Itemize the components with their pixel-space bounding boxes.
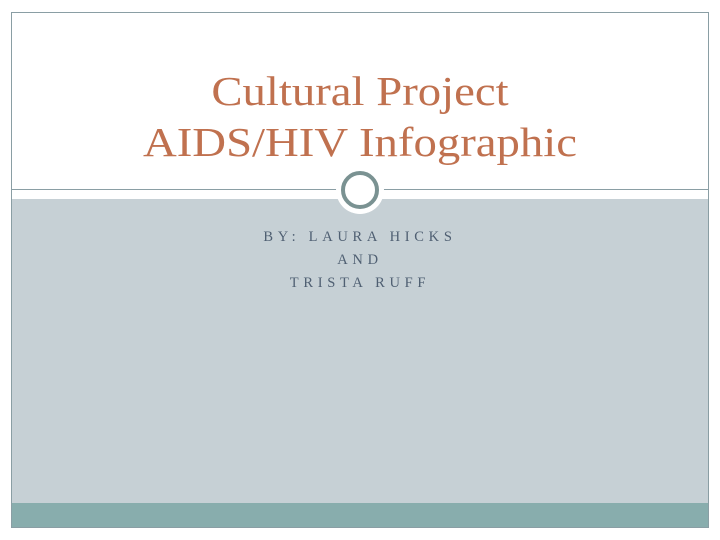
title [143,68,577,165]
title: Cultural Project [211,68,509,114]
subtitle: authors: TRISTA RUFF [290,275,430,291]
subtitle: authors [263,229,457,291]
bottom band [12,503,708,527]
icon: circle ornament [336,166,384,214]
subtitle: authors: BY: LAURA HICKS [263,229,457,245]
subtitle: authors: AND [337,252,383,268]
divider line left [12,189,343,190]
divider line right [380,189,708,190]
gray lower panel [12,199,708,503]
title: AIDS/HIV Infographic [143,119,577,165]
